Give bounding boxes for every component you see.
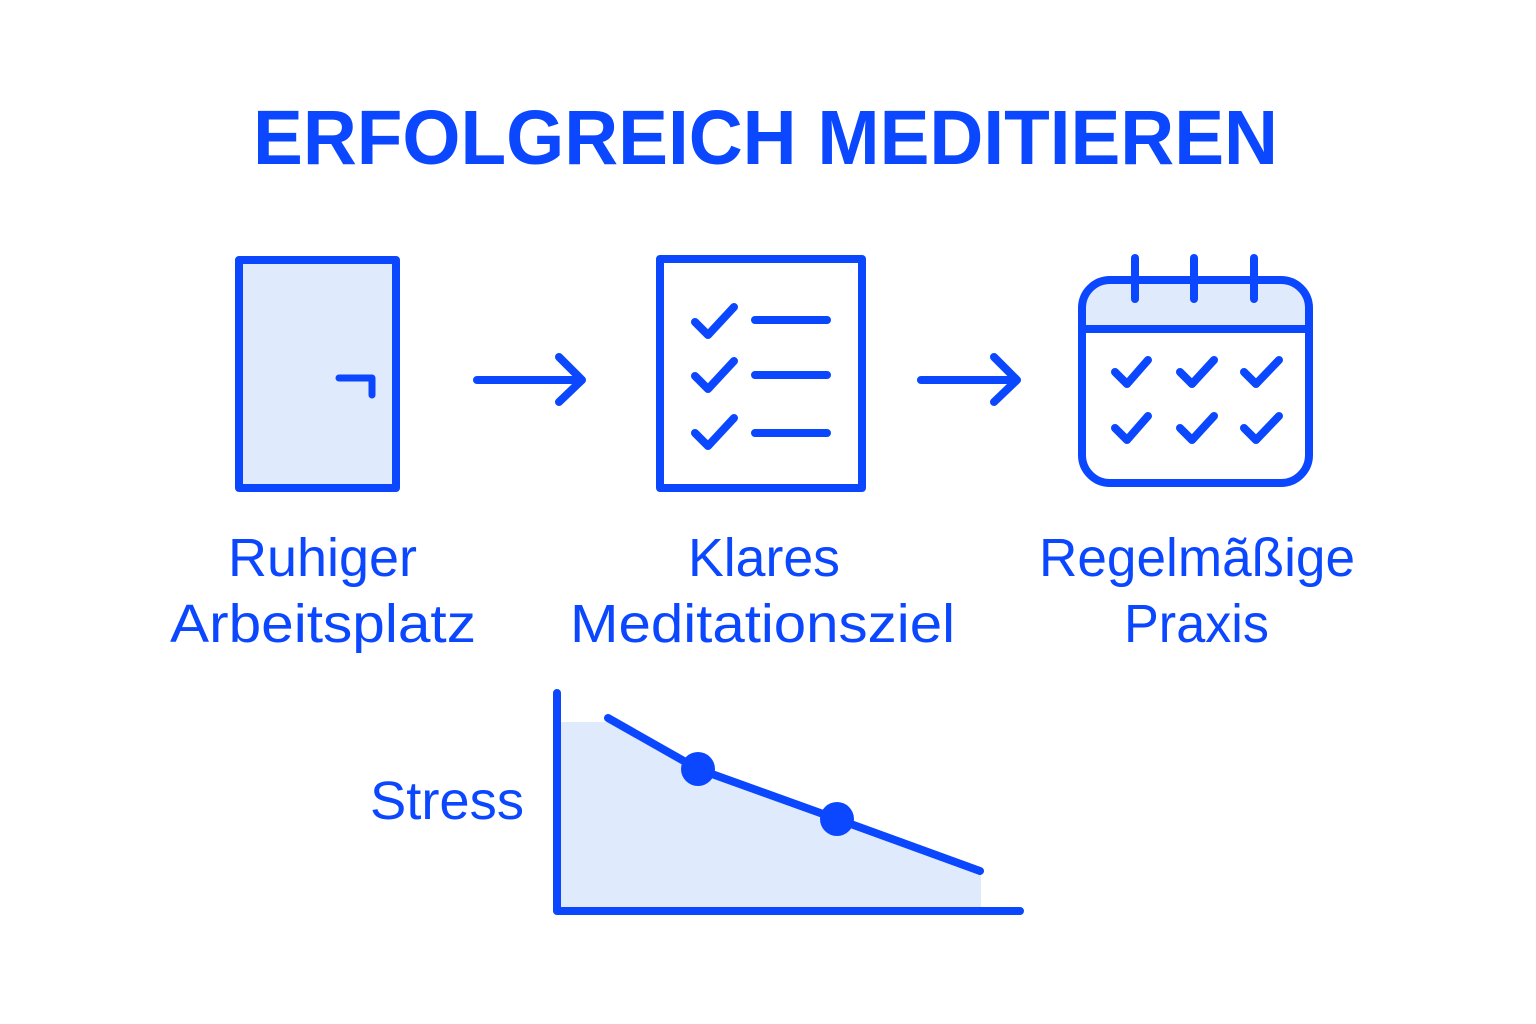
label: Regelmäßige Praxis: Praxis [1124, 594, 1269, 654]
chart line [608, 718, 980, 871]
chart: stress decline [557, 693, 1020, 911]
label: Klares Meditationsziel [570, 528, 955, 654]
label: Klares Meditationsziel: Klares [688, 528, 840, 588]
label: Stress: Stress [370, 771, 524, 831]
title: ERFOLGREICH MEDITIEREN [253, 95, 1278, 181]
chart axes [557, 693, 1020, 911]
icon: checklist [660, 259, 862, 488]
icon: calendar [1082, 258, 1309, 483]
arrow: checklist to calendar [921, 357, 1017, 402]
label: Ruhiger Arbeitsplatz: Arbeitsplatz [170, 594, 476, 654]
label: Ruhiger Arbeitsplatz: Ruhiger [228, 528, 417, 588]
label: Ruhiger Arbeitsplatz [170, 528, 476, 654]
data points [681, 752, 854, 836]
chart area fill [557, 722, 981, 911]
label: Regelmäßige Praxis [1039, 528, 1355, 654]
label: Klares Meditationsziel: Meditationsziel [570, 594, 955, 654]
arrow: door to checklist [477, 357, 582, 402]
icon: door [239, 260, 396, 488]
label: Regelmäßige Praxis: Regelmãßige [1039, 528, 1355, 588]
